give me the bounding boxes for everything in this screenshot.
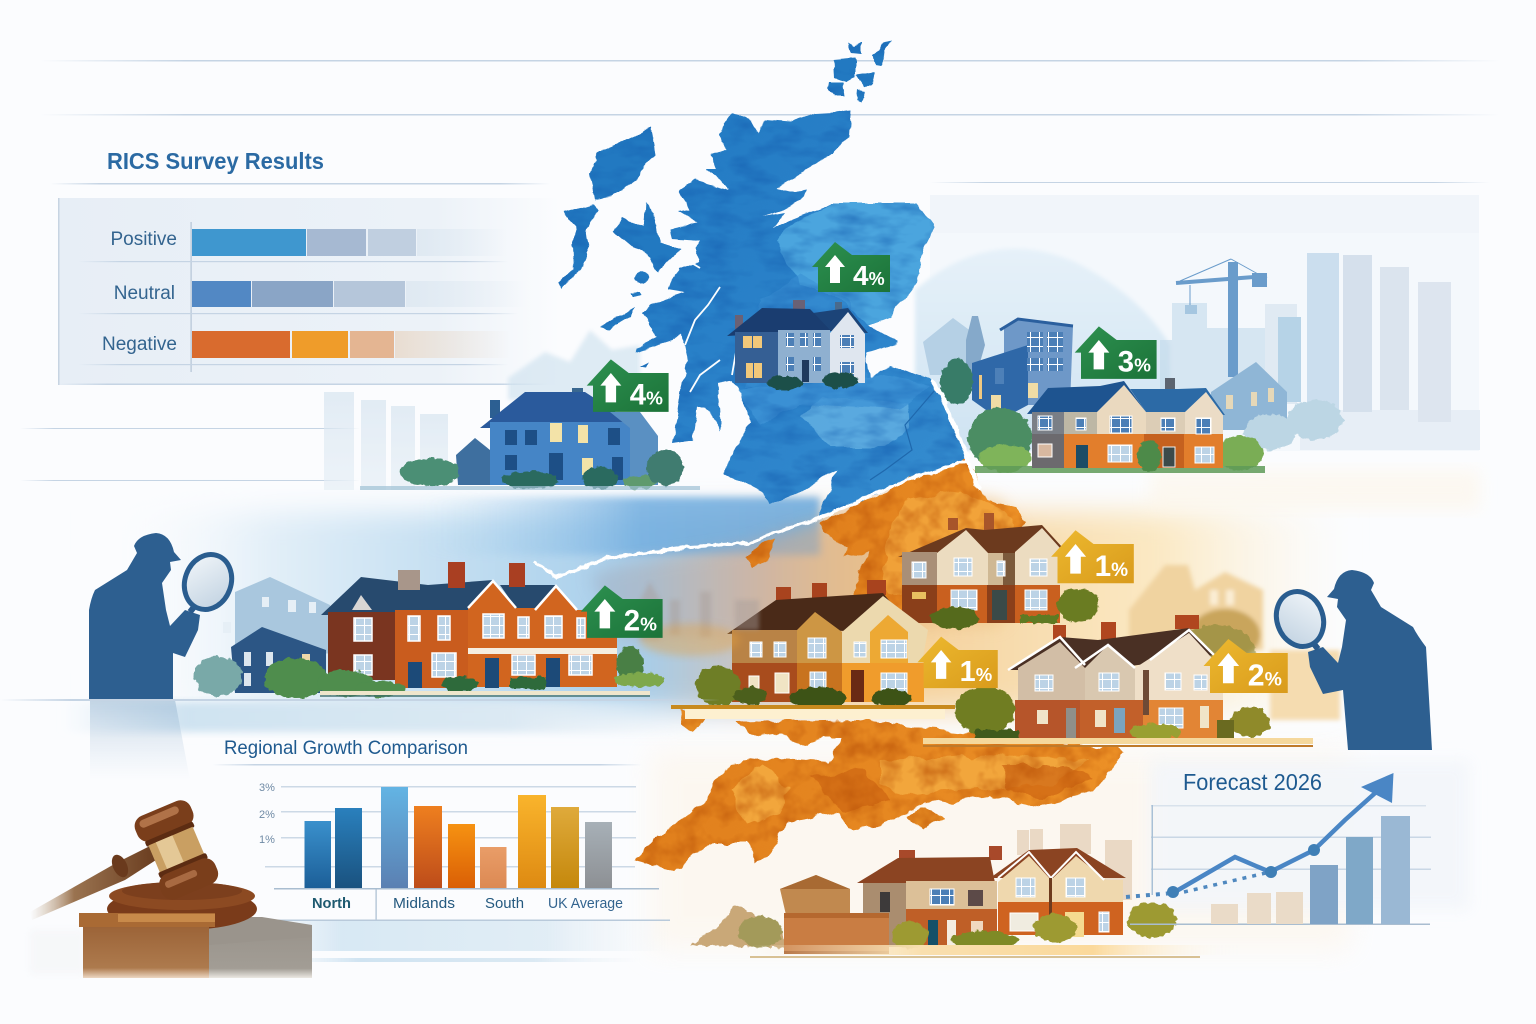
- badge: lower Midlands +1%: [917, 637, 998, 688]
- Outer Hebrides: [560, 127, 656, 290]
- body: [1032, 412, 1064, 434]
- lighter central regions: [745, 275, 868, 388]
- y axis: 2%: [259, 809, 275, 821]
- right house: [990, 848, 1126, 878]
- scene: east house cluster: [968, 378, 1265, 473]
- wooden fence box: [784, 913, 889, 954]
- scene: forecast houses: [690, 824, 1240, 958]
- crane: [1176, 259, 1267, 377]
- central colour wash: [60, 470, 1480, 950]
- bushes left: [690, 905, 790, 948]
- badge: East +3%: [1075, 326, 1157, 379]
- badge: West +4%: [587, 359, 669, 412]
- bars: [304, 787, 612, 888]
- x labels: UK Average: [548, 895, 623, 912]
- badge: upper Midlands +1%: [1051, 530, 1134, 583]
- bushes: [892, 902, 1176, 949]
- icon: gavel and sound block: [30, 797, 312, 978]
- faded left house: [923, 316, 985, 380]
- faded buildings behind: [235, 577, 334, 660]
- chimneys: [398, 570, 420, 590]
- map: Northern England: [680, 460, 1028, 730]
- dark blue house: [231, 627, 326, 693]
- brick walls: [328, 612, 395, 680]
- bushes: [968, 408, 1264, 472]
- map: Scotland: [560, 40, 968, 520]
- badge: North-west +2%: [581, 585, 663, 638]
- lochs and rivers: [685, 262, 736, 392]
- background rules: [20, 60, 1500, 481]
- scene: blue apartment block: [941, 319, 1073, 420]
- grey block: [209, 930, 312, 978]
- badge: South +2%: 2%: [1248, 659, 1282, 692]
- grid: [1130, 805, 1431, 925]
- heading: RICS Survey Results: RICS Survey Results: [107, 148, 324, 174]
- podium: [83, 927, 209, 978]
- handle: [30, 846, 156, 920]
- scene: upper orange house: [898, 513, 1099, 629]
- scene: red brick terrace: [194, 562, 666, 698]
- background bars: [1017, 824, 1132, 900]
- windows: [1038, 416, 1211, 434]
- trend line and arrow: [1126, 773, 1394, 898]
- badge: upper Midlands +1%: 1%: [1095, 550, 1128, 583]
- row: Negative: Negative: [102, 334, 177, 355]
- doors: [408, 658, 560, 688]
- bushes: [400, 450, 683, 489]
- badge: lower Midlands +1%: 1%: [960, 656, 992, 688]
- inspector right: [1269, 570, 1432, 750]
- badge: East +3%: 3%: [1118, 345, 1151, 378]
- row: Positive: Positive: [110, 229, 177, 250]
- chart: Forecast 2026: [1126, 769, 1431, 925]
- chimney: [572, 388, 583, 407]
- walls: [735, 332, 778, 383]
- y axis: 1%: [259, 834, 275, 846]
- y axis: 3%: [259, 782, 275, 794]
- faded bars and houses behind west house: [324, 330, 640, 490]
- silhouette: [89, 533, 200, 700]
- x labels: Midlands: [393, 895, 455, 912]
- torn edge on the east side: [930, 380, 980, 490]
- bushes: [767, 372, 858, 390]
- inspector left: [89, 533, 239, 780]
- panel: RICS survey results: [50, 148, 560, 385]
- scene: right orange house: [923, 615, 1313, 747]
- x labels: [312, 895, 623, 912]
- y axis: [259, 782, 275, 846]
- scene: faded background buildings right: [923, 253, 1451, 450]
- roof: [321, 577, 516, 615]
- scene: faded right warm house: [1129, 565, 1340, 720]
- badge: South +2%: [1204, 639, 1288, 693]
- lighter north-east region: [775, 203, 935, 325]
- badge: Scotland +4%: [812, 242, 890, 292]
- chimney: [1165, 378, 1175, 396]
- windows: [354, 614, 592, 677]
- chart: Regional Growth Comparison: [212, 738, 670, 962]
- faded pale trees: [1244, 400, 1343, 450]
- torn border between Scotland and England: [535, 460, 968, 577]
- warm scrub: [640, 624, 740, 656]
- badge: West +4%: 4%: [630, 378, 663, 411]
- sound block: [107, 888, 257, 930]
- mainland: [635, 110, 968, 520]
- trees beside apartment: [941, 358, 973, 404]
- scene: west blue terrace: [360, 388, 700, 490]
- scene: Scotland house: [727, 300, 868, 390]
- map: Southern England: [633, 720, 1124, 870]
- reflection: [90, 700, 190, 780]
- row: Positive: [110, 229, 507, 256]
- bushes: [696, 666, 912, 709]
- small house: [780, 875, 850, 915]
- bushes: [955, 686, 1270, 740]
- roof: [1027, 381, 1146, 414]
- forecast bars: [1211, 816, 1410, 924]
- Shetland and Orkney: [828, 40, 892, 102]
- magnifying glass: [177, 548, 239, 616]
- head: [131, 797, 222, 903]
- badge: Scotland +4%: 4%: [853, 260, 885, 291]
- bushes: [194, 647, 666, 698]
- x labels: South: [485, 895, 524, 912]
- dusk skyline: [640, 582, 759, 640]
- grid lines: [265, 786, 659, 890]
- badge: North-west +2%: 2%: [624, 604, 657, 637]
- scene: left orange house: [671, 580, 955, 719]
- row: Neutral: Neutral: [114, 283, 175, 304]
- x labels: North: [312, 895, 351, 912]
- pedestal shadow: [30, 930, 85, 974]
- background bars: [1265, 253, 1451, 422]
- pale band: [260, 921, 670, 951]
- roof: [813, 308, 868, 333]
- brown roof house: [989, 846, 1002, 860]
- Skye and Inner Hebrides: [600, 203, 680, 366]
- row: Negative: [102, 331, 510, 358]
- chart heading: Regional Growth Comparison: [224, 738, 468, 759]
- horizontal band under left scene: [0, 699, 720, 701]
- row: Neutral: [114, 281, 526, 307]
- heading: Forecast 2026: Forecast 2026: [1183, 769, 1322, 795]
- right background panel: [915, 195, 1480, 451]
- small side house: [456, 438, 490, 485]
- faded blue house: [1211, 362, 1287, 430]
